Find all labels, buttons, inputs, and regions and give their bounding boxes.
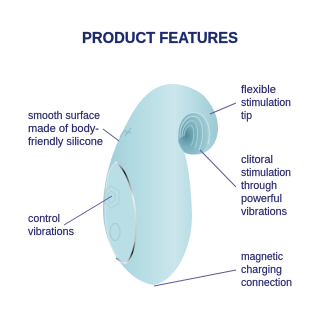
- label: control vibrations: [28, 213, 74, 238]
- label: clitoral stimulation: through: [241, 180, 277, 192]
- label: flexible tip: tip: [241, 110, 252, 122]
- label: flexible tip: [241, 84, 291, 122]
- control panel oval: [105, 163, 136, 262]
- panel left edge: [105, 163, 118, 257]
- label: clitoral stimulation: clitoral: [241, 154, 273, 166]
- label: smooth surface: friendly silicone: [28, 136, 103, 148]
- label: clitoral stimulation: stimulation: [241, 167, 291, 179]
- label: control vibrations: vibrations: [28, 226, 74, 238]
- label: smooth surface: smooth surface: [28, 110, 100, 122]
- label: flexible tip: flexible: [241, 84, 276, 96]
- flexible tip ridges: [178, 112, 209, 154]
- label: smooth surface: made of body-: [28, 123, 99, 135]
- label: smooth surface: [28, 110, 103, 148]
- label: magnetic charging: [241, 251, 292, 289]
- device body: [103, 84, 218, 285]
- silver ring: [115, 162, 136, 263]
- label: control vibrations: control: [28, 213, 60, 225]
- label: magnetic charging: magnetic: [241, 251, 283, 263]
- logo: [120, 128, 131, 137]
- label: flexible tip: stimulation: [241, 97, 291, 109]
- vibration control button: [105, 186, 119, 208]
- title: PRODUCT FEATURES: [82, 30, 238, 47]
- power button: [110, 224, 120, 240]
- label: magnetic charging: charging: [241, 264, 282, 276]
- label: magnetic charging: connection: [241, 277, 292, 289]
- label: clitoral stimulation: powerful: [241, 193, 282, 205]
- label: clitoral stimulation: vibrations: [241, 206, 287, 218]
- product illustration: [103, 84, 218, 285]
- leader lines: [64, 103, 236, 286]
- label: clitoral stimulation: [241, 154, 291, 218]
